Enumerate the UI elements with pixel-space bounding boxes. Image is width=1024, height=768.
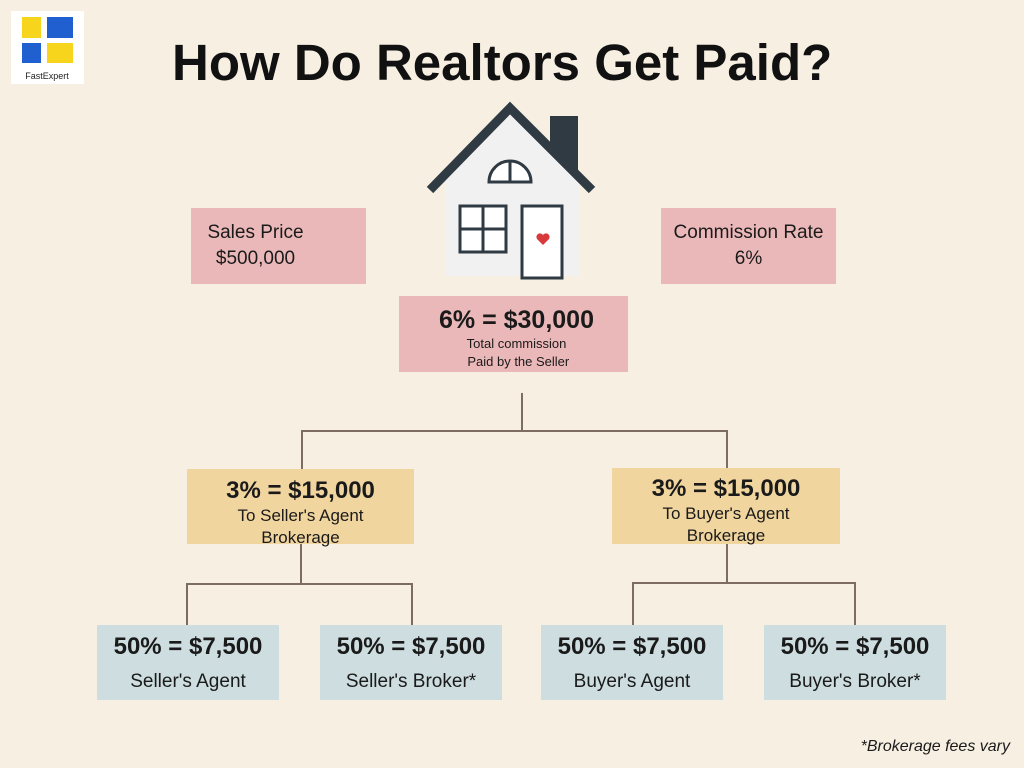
seller's broker box	[320, 625, 502, 700]
buyer's agent box: 50% = $7,500	[558, 633, 706, 660]
seller brokerage box: Brokerage	[261, 528, 340, 547]
total commission box: Total commission	[467, 336, 566, 351]
buyer's agent box	[541, 625, 723, 700]
total commission box	[399, 296, 628, 372]
buyer's broker box: 50% = $7,500	[781, 633, 929, 660]
buyer's agent box: Buyer's Agent	[574, 671, 690, 692]
buyer brokerage box: 3% = $15,000	[652, 475, 800, 502]
seller brokerage box	[187, 469, 414, 544]
total commission box: Paid by the Seller	[467, 354, 569, 369]
sales price box: $500,000	[216, 248, 295, 269]
commission rate box: Commission Rate	[674, 222, 823, 243]
logo	[11, 11, 84, 84]
commission rate box	[661, 208, 836, 284]
icon: house	[426, 102, 596, 280]
buyer brokerage box: Brokerage	[687, 526, 765, 545]
seller's agent box	[97, 625, 279, 700]
seller's agent box: 50% = $7,500	[114, 633, 262, 660]
seller's broker box: 50% = $7,500	[337, 633, 485, 660]
sales price box	[191, 208, 366, 284]
buyer's broker box	[764, 625, 946, 700]
seller brokerage box: 3% = $15,000	[226, 477, 375, 504]
logo: FastExpert	[25, 71, 69, 81]
total commission box: 6% = $30,000	[439, 306, 594, 334]
seller's agent box: Seller's Agent	[130, 671, 246, 692]
buyer's broker box: Buyer's Broker*	[789, 671, 921, 692]
seller's broker box: Seller's Broker*	[346, 671, 476, 692]
sales price box: Sales Price	[207, 222, 304, 243]
seller brokerage box: To Seller's Agent	[237, 506, 364, 525]
buyer brokerage box: To Buyer's Agent	[662, 504, 790, 523]
commission rate box: 6%	[735, 248, 762, 269]
title: How Do Realtors Get Paid?	[172, 34, 832, 91]
buyer brokerage box	[612, 468, 840, 544]
footnote: *Brokerage fees vary	[861, 738, 1010, 755]
